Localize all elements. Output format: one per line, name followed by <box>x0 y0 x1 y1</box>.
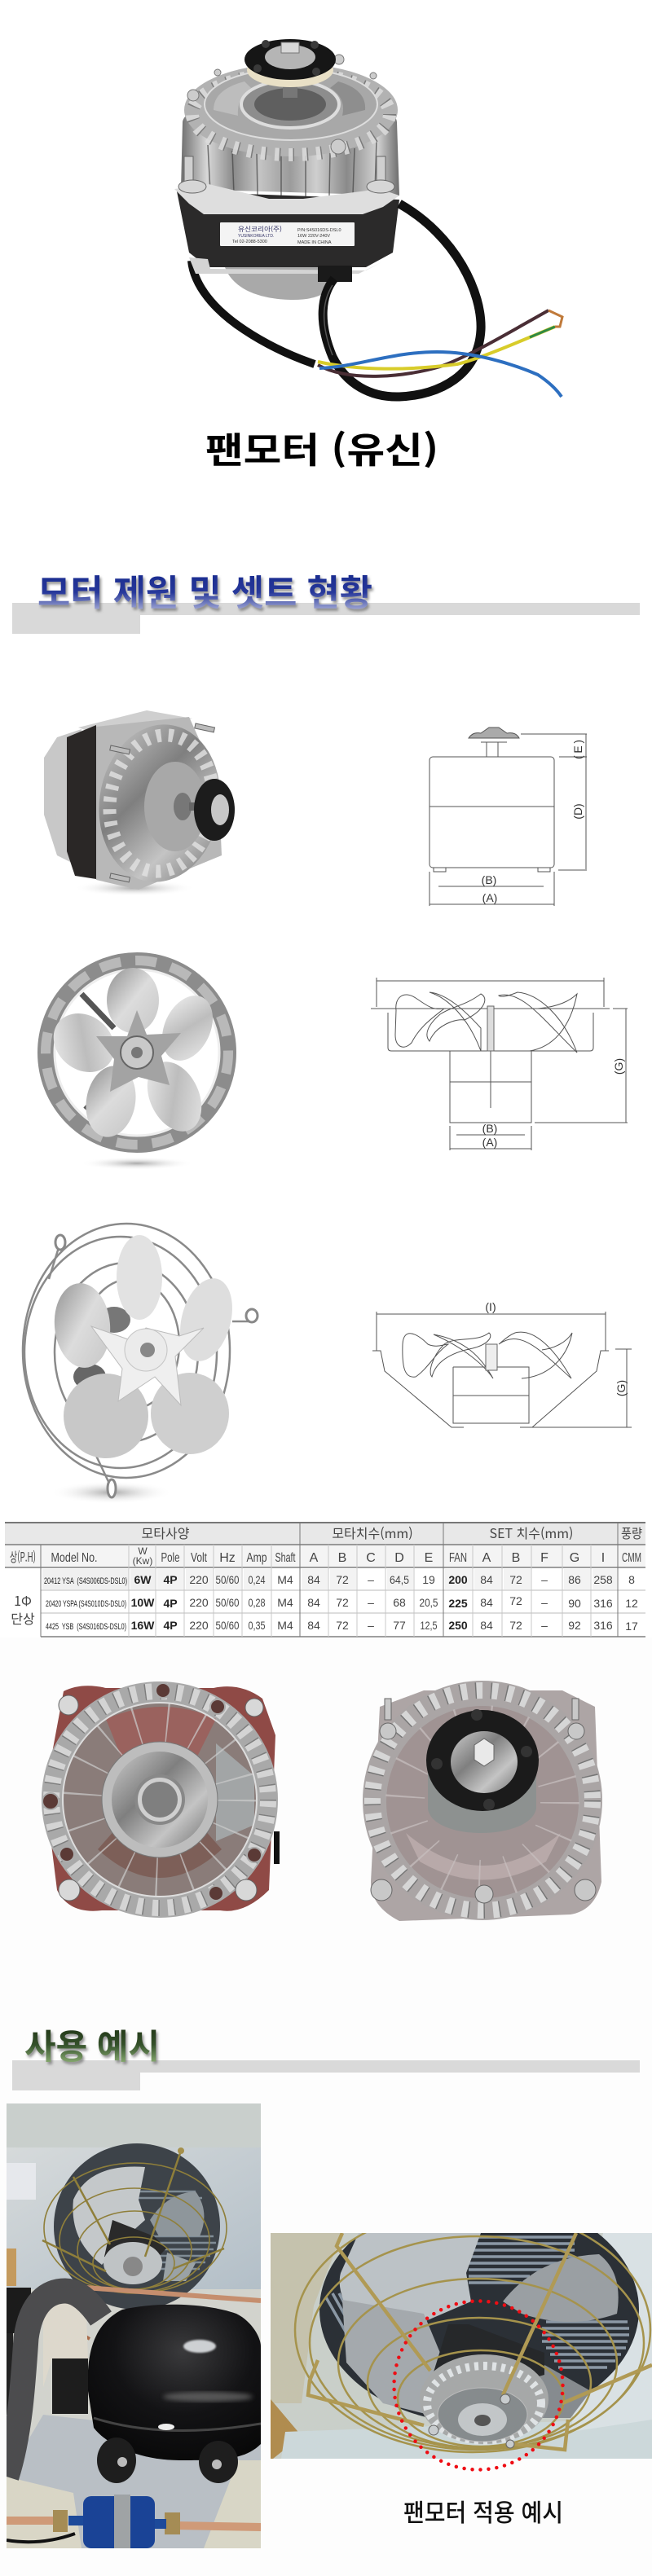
compressor shell <box>88 2305 261 2460</box>
dark fan opening <box>319 2233 639 2417</box>
specifications table: 0,35 <box>248 1619 266 1632</box>
bolts on top <box>187 55 377 154</box>
table header background <box>5 1522 645 1545</box>
technical drawing: fan and tray: (A) <box>482 1136 497 1149</box>
phase label: 1Φ <box>14 1590 32 1610</box>
specifications table: M4 <box>277 1596 293 1609</box>
specifications table: M4 <box>277 1619 293 1632</box>
spec label sticker <box>7 2163 36 2200</box>
row 10W: 20420 YSPA (S4S010DS-DSL0) <box>46 1599 126 1609</box>
group headings: 모타사양 <box>142 1523 190 1542</box>
specifications table: B <box>512 1551 520 1565</box>
nameplate <box>220 222 355 246</box>
specifications table: 92 <box>568 1619 581 1632</box>
rear cable <box>192 261 315 364</box>
dimension labels: (I) <box>485 1300 496 1313</box>
specifications table: – <box>368 1619 374 1632</box>
section header: motor specifications <box>12 564 640 634</box>
photo: motor rear face <box>42 1681 280 1918</box>
technical drawing: motor dimensions <box>430 728 587 906</box>
flange plate <box>174 184 399 214</box>
hub shaft <box>428 1760 536 1833</box>
specifications table: 316 <box>593 1597 613 1610</box>
specifications table: FAN <box>449 1551 467 1565</box>
rubber hub <box>194 779 235 841</box>
pale panel gap <box>43 2296 88 2387</box>
specifications table: 6W <box>134 1573 152 1586</box>
specifications table: D <box>394 1551 404 1565</box>
specifications table: 316 <box>593 1619 613 1632</box>
row 6W: 20412 YSA (S4S006DS-DSL0) <box>44 1576 127 1586</box>
specifications table: 50/60 <box>215 1573 240 1586</box>
specifications table: – <box>541 1596 548 1609</box>
specifications table: 84 <box>307 1619 320 1632</box>
specifications table: 19 <box>422 1573 435 1586</box>
technical drawing: fan and tray: (B) <box>482 1122 497 1135</box>
motor body <box>434 2324 544 2376</box>
photo: fan with wire guard <box>23 1224 258 1504</box>
specifications table: 16W <box>131 1619 155 1632</box>
nameplate: YUSINKOREA LTD. <box>238 234 274 239</box>
specifications table: 4P <box>163 1573 178 1586</box>
dimension labels: (G) <box>612 1058 625 1075</box>
technical drawing: fan with guard <box>372 1300 632 1427</box>
technical drawing: motor dimensions: (B) <box>482 873 496 886</box>
specifications table: W <box>138 1545 148 1557</box>
specifications table <box>5 1522 645 1637</box>
specifications table: 17 <box>625 1620 638 1633</box>
technical drawing: fan and tray <box>371 978 628 1150</box>
specifications table: – <box>541 1619 548 1632</box>
photo: condensing unit with compressor <box>7 2103 261 2548</box>
wire guard <box>42 2151 227 2293</box>
nameplate: Tel 02-2088-5300 <box>232 240 267 244</box>
specifications table: – <box>368 1596 374 1609</box>
specifications table: 200 <box>448 1573 468 1586</box>
technical drawing: motor dimensions: (A) <box>482 891 497 904</box>
specifications table: 풍량 <box>621 1523 642 1542</box>
nameplate: MADE IN CHINA <box>297 240 332 245</box>
specifications table: 77 <box>393 1619 406 1632</box>
specifications table: 50/60 <box>215 1596 240 1609</box>
specifications table: 12 <box>625 1597 638 1610</box>
foam insulation tube <box>7 2291 101 2477</box>
specifications table: 단상 <box>11 1608 35 1628</box>
specifications table: 84 <box>307 1573 320 1586</box>
specifications table: 250 <box>448 1619 468 1632</box>
floor tones <box>7 2415 261 2548</box>
specifications table: 12,5 <box>421 1619 438 1632</box>
highlight: red dotted circle <box>394 2301 562 2470</box>
coil fins <box>326 2237 629 2367</box>
photo: fan with ring mount <box>42 961 228 1170</box>
specifications table: – <box>368 1573 374 1586</box>
copper pipe <box>86 2288 261 2301</box>
caption: 팬모터 적용 예시 <box>403 2493 563 2529</box>
specifications table: A <box>310 1551 319 1565</box>
small motor <box>104 2220 166 2257</box>
specifications table: 20,5 <box>419 1596 438 1609</box>
black stator band <box>177 191 399 267</box>
specifications table: 4P <box>163 1619 178 1632</box>
cylinder housing <box>181 98 399 196</box>
photo: motor alone, three-quarter view <box>44 710 235 896</box>
specifications table: Shaft <box>275 1551 296 1565</box>
row 16W: 4425 YSB (S4S016DS-DSL0) <box>46 1622 126 1632</box>
specifications table: 84 <box>480 1596 493 1609</box>
specifications table: G <box>570 1551 579 1565</box>
specifications table: 72 <box>336 1619 349 1632</box>
title: 팬모터 (유신) <box>205 421 438 473</box>
specifications table: 84 <box>480 1619 493 1632</box>
specifications table: Amp <box>246 1551 267 1565</box>
specifications table: 72 <box>336 1573 349 1586</box>
specifications table: SET 치수(mm) <box>490 1523 573 1542</box>
specifications table: 90 <box>568 1597 581 1610</box>
lower motor housing <box>224 265 345 300</box>
specifications table: Hz <box>219 1551 236 1565</box>
wire guard <box>295 2208 652 2452</box>
product photo: fan motor with cable <box>174 39 562 397</box>
coloured wires <box>318 310 548 376</box>
fan hub rubber disk <box>244 39 336 98</box>
specifications table: A <box>482 1551 491 1565</box>
header bar <box>12 2060 640 2090</box>
terminal box <box>52 2358 88 2414</box>
specifications table: M4 <box>277 1573 293 1586</box>
motor face <box>420 2354 548 2444</box>
dark block left <box>7 2288 31 2333</box>
header text: 사용 예시 <box>24 2020 160 2069</box>
nameplate: 유신코리아(주) <box>238 225 282 234</box>
specifications table: 72 <box>509 1619 522 1632</box>
nameplate: P/N:S4S016DS-DSL0 <box>297 228 341 233</box>
specifications table: – <box>541 1573 548 1586</box>
specifications table: 258 <box>593 1573 613 1586</box>
specifications table: 220 <box>189 1573 209 1586</box>
specifications table: 84 <box>307 1596 320 1609</box>
fan opening <box>54 2143 220 2310</box>
specifications table: E <box>425 1551 433 1565</box>
specifications table: 225 <box>448 1597 468 1610</box>
nameplate: 16W 220V-240V <box>297 234 330 239</box>
specifications table: 0,24 <box>248 1573 266 1586</box>
specifications table: Model No. <box>51 1551 98 1565</box>
mounting studs <box>178 156 394 193</box>
fan blades <box>339 2233 481 2320</box>
specifications table: 68 <box>393 1596 406 1609</box>
compressor feet <box>97 2438 238 2483</box>
specifications table: (Kw) <box>133 1555 152 1567</box>
specifications table: 모타치수(mm) <box>332 1523 413 1542</box>
specifications table: 10W <box>131 1596 155 1609</box>
specifications table: 86 <box>568 1573 581 1586</box>
cable gland <box>318 266 352 282</box>
specifications table: 72 <box>336 1596 349 1609</box>
photo: motor front face with rubber hub <box>363 1681 602 1921</box>
specifications table: 84 <box>480 1573 493 1586</box>
technical drawing: motor dimensions: (D) <box>571 803 584 820</box>
specifications table: 72 <box>509 1573 522 1586</box>
header text: 모터 제원 및 셋트 현황 <box>37 564 372 616</box>
specifications table: Pole <box>161 1551 180 1565</box>
section header: usage examples <box>12 2020 640 2090</box>
specifications table: 220 <box>189 1619 209 1632</box>
bolts <box>429 2394 514 2448</box>
dimension labels: (E) <box>571 740 584 759</box>
specifications table: B <box>338 1551 346 1565</box>
main cable loop <box>323 204 481 397</box>
specifications table: 220 <box>189 1596 209 1609</box>
column headings: 상(P.H) <box>10 1546 36 1566</box>
filter drier and copper lines <box>7 2521 261 2527</box>
specifications table: 8 <box>628 1573 635 1586</box>
photo: fan motor application close-up <box>271 2233 652 2459</box>
specifications table: 4P <box>163 1597 178 1610</box>
header bar <box>12 603 640 634</box>
specifications table: Volt <box>191 1551 207 1565</box>
specifications table: C <box>366 1551 376 1565</box>
specifications table: 72 <box>509 1594 522 1607</box>
technical drawing: fan with guard: (G) <box>615 1380 628 1396</box>
top cap <box>184 64 398 156</box>
specifications table: I <box>601 1551 605 1565</box>
specifications table: 0,28 <box>248 1596 266 1609</box>
specifications table: 64,5 <box>390 1573 409 1586</box>
specifications table: F <box>540 1551 548 1565</box>
specifications table: 50/60 <box>215 1619 240 1632</box>
